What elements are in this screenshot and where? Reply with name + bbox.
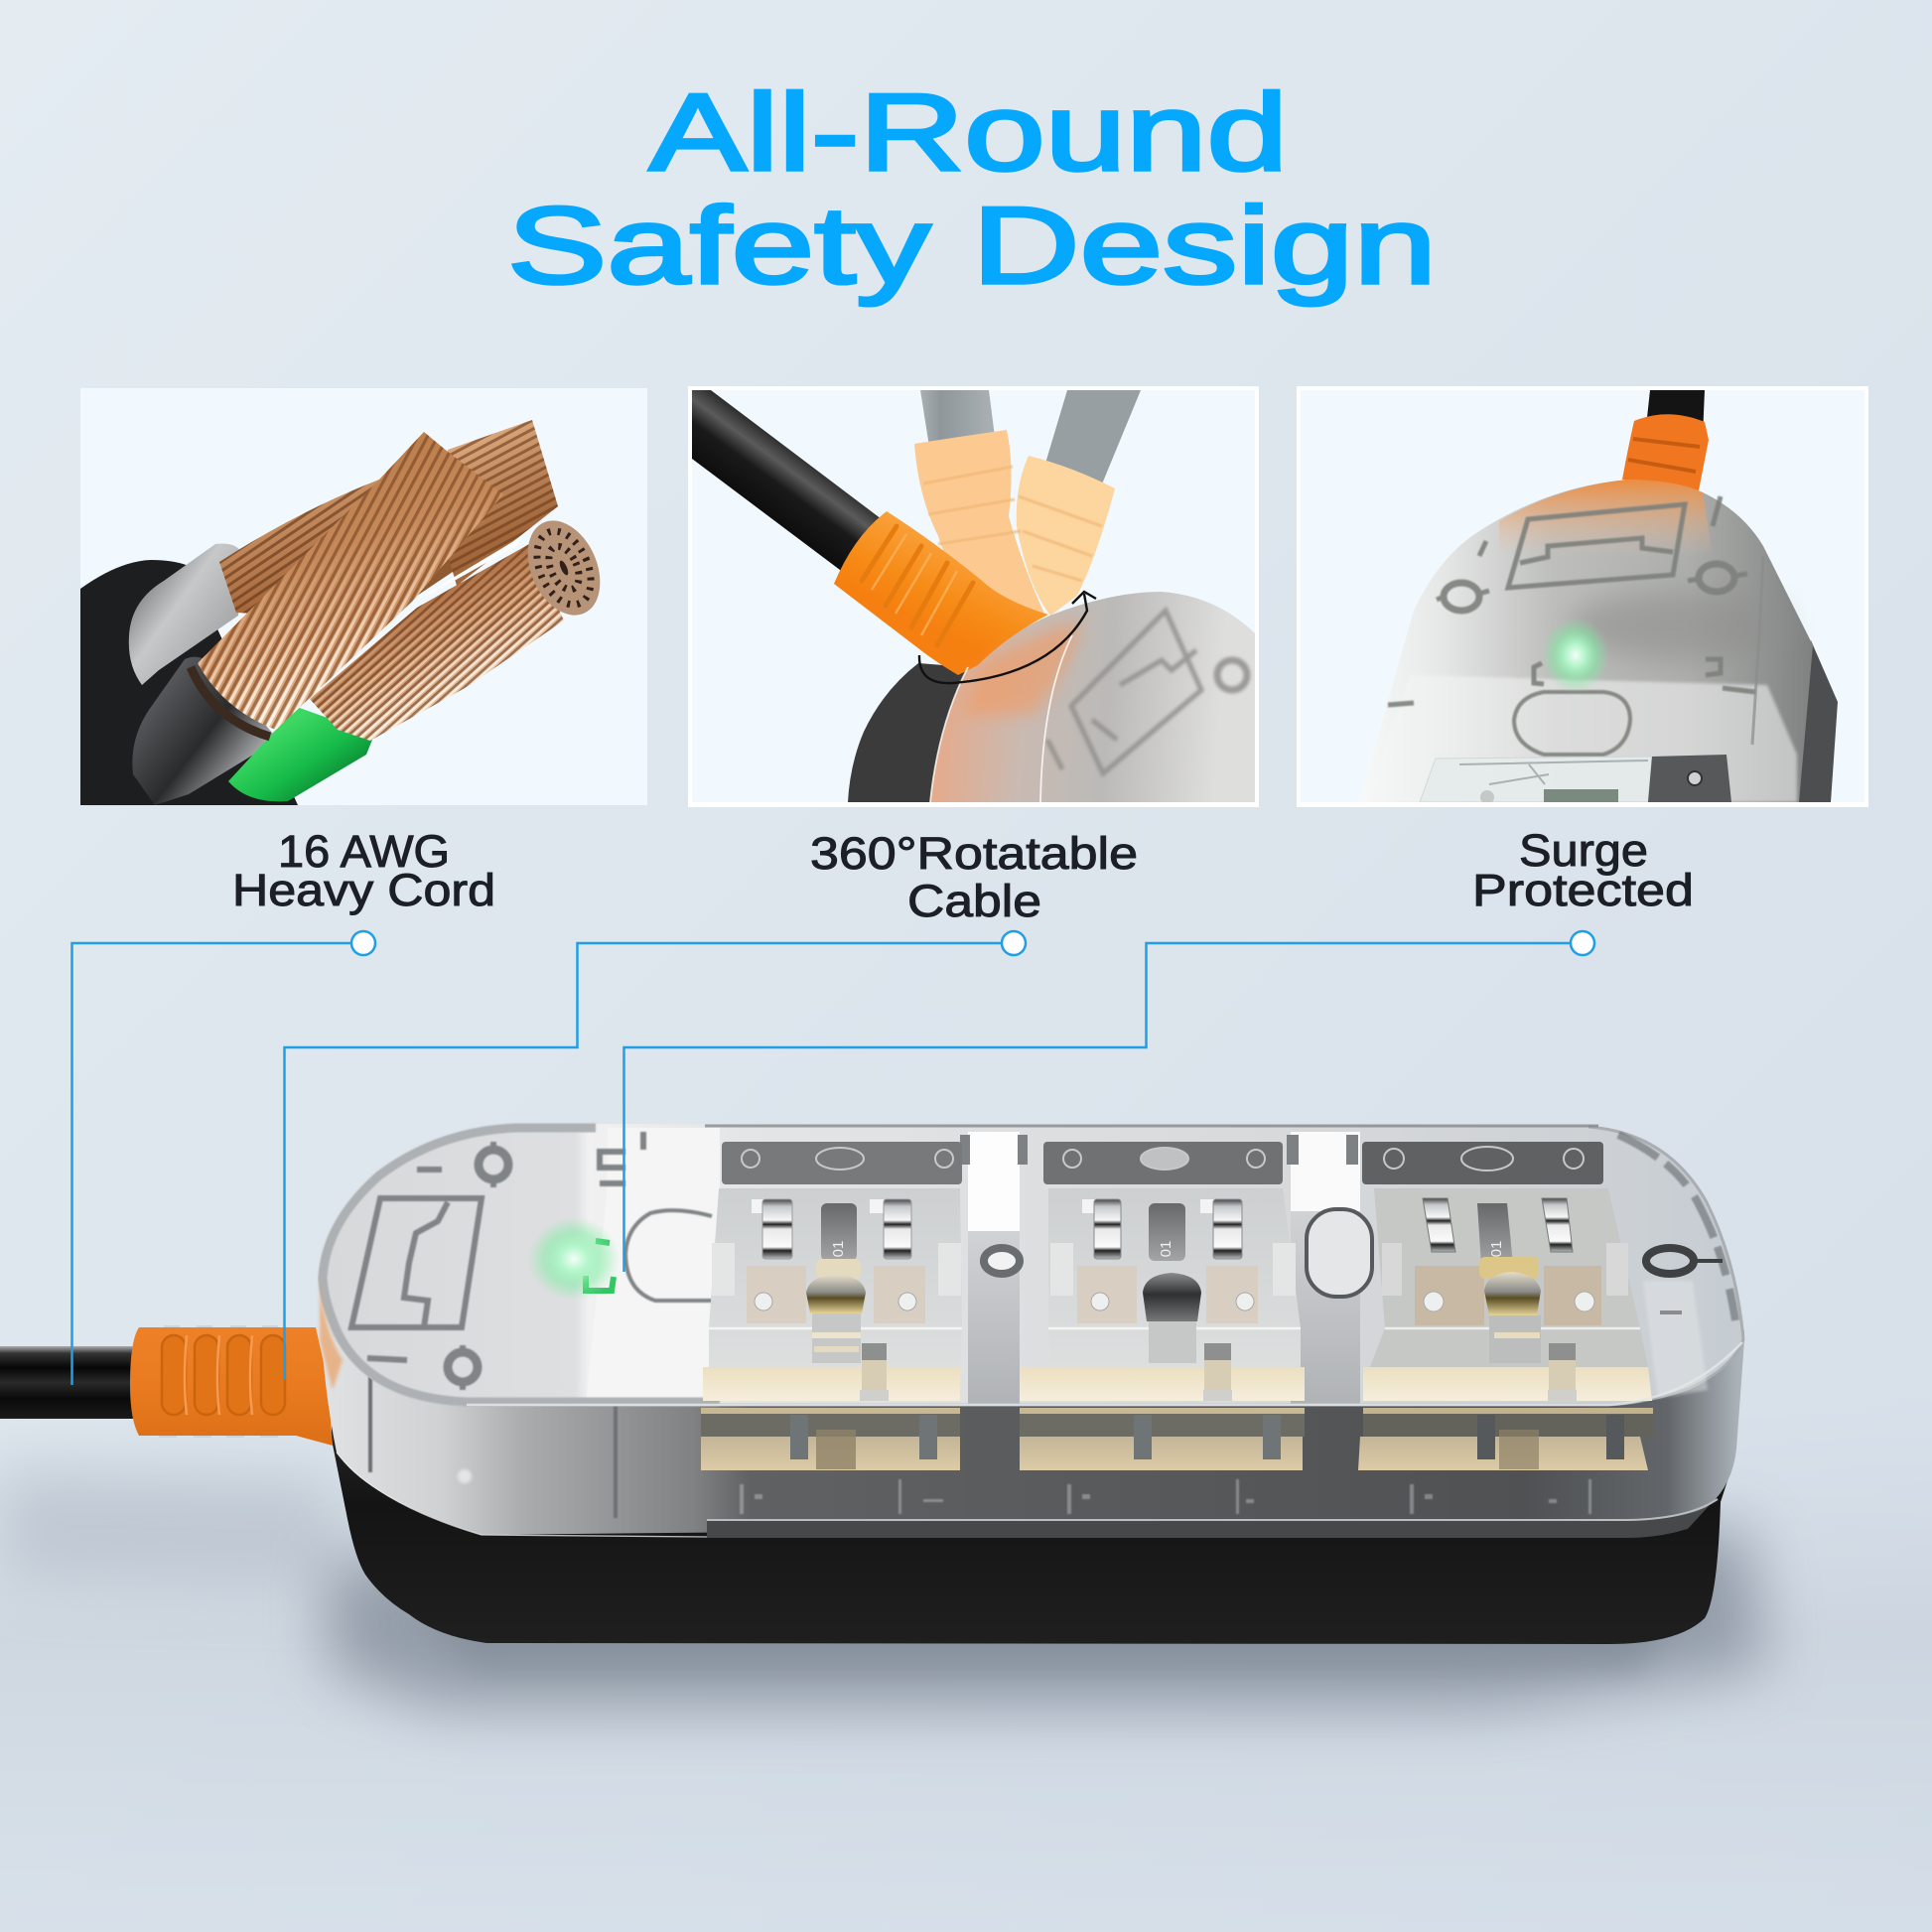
label: 360 Rotatable Cable: Cable: [907, 876, 1041, 926]
circuit line art: [1047, 611, 1247, 773]
orange glow in cap: [963, 621, 1082, 715]
outlet 1 rating text: 01: [830, 1241, 847, 1257]
outlet 3 tab: [1548, 1343, 1577, 1401]
label: 360 Rotatable Cable: [810, 828, 1138, 926]
label: 16 AWG Heavy Cord: 16 AWG: [278, 826, 450, 877]
outlet 2 ground pin: [1143, 1273, 1201, 1363]
dark device shell: [848, 663, 968, 802]
green LED bracket: [586, 1241, 614, 1291]
lid front edge highlight: [467, 1342, 1742, 1405]
outlet 3 screws: [1424, 1292, 1594, 1311]
label: Surge Protected: [1472, 825, 1694, 915]
outlet 2 body detail: [1048, 1243, 1301, 1328]
orange rib highlights: [872, 534, 957, 635]
left base seam: [337, 1452, 707, 1537]
top rim line: [705, 1124, 1598, 1128]
outlet 3 slots: [1423, 1198, 1573, 1252]
cap seam highlight: [930, 635, 1072, 802]
copper strand: centre twist: [198, 432, 503, 730]
outlet 1 slots: [752, 1199, 911, 1259]
outlet 1 screws: [755, 1293, 916, 1311]
status LED glow: [1542, 618, 1609, 693]
outlet 1 ground pin: [806, 1259, 866, 1363]
outlet 3 centre recess: [1477, 1203, 1513, 1265]
outlet 2 tan pads: [1077, 1266, 1258, 1323]
callout connector: 360 rotatable: [284, 931, 1026, 1380]
copper strand: back right: [437, 420, 558, 586]
small light spot: [458, 1469, 472, 1483]
centre column between outlets: [960, 1132, 1028, 1405]
title: All-Round: [649, 71, 1288, 194]
right lid rim: [720, 1127, 1743, 1405]
outlet 2: [1020, 1142, 1305, 1470]
rotation arrow: [919, 592, 1096, 683]
outlet 1 lower cream bar: [701, 1408, 960, 1470]
lid top: [318, 1124, 1744, 1406]
ghost ribs: [923, 467, 1102, 581]
label: 16 AWG Heavy Cord: [232, 826, 495, 915]
outlet 3 cream bar: [1363, 1367, 1652, 1401]
outlet 2 slots: [1082, 1199, 1242, 1259]
white frosted block: [586, 1128, 720, 1404]
right lid clear reflection: [1643, 1281, 1708, 1398]
outlet 1 cream bar: [703, 1367, 960, 1401]
callout connector: surge protected: [623, 931, 1594, 1272]
frosted device cap: [930, 592, 1255, 802]
outlet 2 screws: [1091, 1293, 1254, 1311]
plate screw: [1688, 771, 1702, 785]
grey insulated wire: [129, 544, 243, 685]
outlet 2 tab: [1203, 1343, 1232, 1401]
outlet 1 clear body: [709, 1188, 962, 1367]
right lid glass streaks: [1618, 1135, 1735, 1320]
label: 16 AWG Heavy Cord: Heavy Cord: [232, 865, 495, 915]
outlet 1 centre recess: [821, 1203, 857, 1261]
outlet 1: [701, 1142, 962, 1470]
outlet 1 top plate: [722, 1142, 962, 1184]
orange ribs: [1628, 439, 1700, 472]
black cord jacket: [80, 560, 298, 805]
outlet 3 top plate: [1362, 1142, 1603, 1184]
device shadow on floor: [0, 1469, 1767, 1708]
outlet 2 centre recess: [1149, 1203, 1185, 1261]
outlet 1 tan pads: [747, 1266, 925, 1323]
title: [507, 71, 1437, 307]
ghost strain relief left: [914, 430, 1044, 625]
orange ribs: [862, 526, 973, 645]
black base: [332, 1390, 1734, 1644]
outlet 1 tab: [860, 1343, 889, 1401]
outlet 3: [1358, 1142, 1653, 1470]
outlet 2 plate holes: [1063, 1148, 1265, 1170]
orange strain relief: [1622, 414, 1709, 490]
outlet 3 plate holes: [1384, 1147, 1584, 1171]
status LED glow: [528, 1217, 620, 1301]
black power cord: [692, 390, 882, 573]
dark side of housing: [1787, 640, 1838, 802]
orange strain relief: [130, 1326, 333, 1446]
circuit line art: [1388, 496, 1755, 755]
outlet 2 cream bar: [1020, 1367, 1305, 1401]
outlet 2 rating text: 01: [1158, 1241, 1174, 1257]
outlet 3 lower cream bar: [1358, 1408, 1653, 1470]
right column between outlets: [1287, 1132, 1372, 1405]
outlet 2 clear body: [1048, 1188, 1301, 1367]
dark copper backing: [417, 558, 453, 596]
outlet 3 tan pads: [1415, 1266, 1601, 1325]
dark metal plate: [1648, 755, 1731, 802]
right lid circuit circle: [1646, 1248, 1723, 1312]
wall vertical lines: [370, 1358, 616, 1518]
copper strand: back left: [219, 480, 379, 614]
orange strain relief: [834, 511, 1048, 675]
grey ghost cables: [920, 390, 1141, 486]
power cord: [0, 1346, 134, 1419]
callout connector: 16 AWG: [71, 931, 375, 1385]
black power cord: [1647, 390, 1705, 421]
base lip highlight: [707, 1499, 1718, 1520]
circuit line art under frosted lid: [351, 1132, 712, 1390]
power strip product: [0, 1124, 1744, 1644]
outlet 1 body detail: [709, 1243, 962, 1328]
outlet 3 ground pin: [1479, 1257, 1541, 1363]
outlet 3 clear body: [1370, 1188, 1648, 1367]
outlet 1 plate holes: [742, 1148, 953, 1170]
left lid rim: [323, 1128, 720, 1402]
lower light band: [1365, 675, 1797, 802]
outlet 3 rating text: 01: [1488, 1241, 1505, 1257]
orange tint through lid: [320, 1281, 343, 1390]
clear wall front: [320, 1311, 1744, 1535]
outlet 2 lower cream bar: [1020, 1408, 1305, 1470]
base lip band: [707, 1505, 1710, 1538]
internal speckles: [740, 1479, 1591, 1514]
title: Safety Design: [507, 185, 1437, 307]
copper strand: front lower: [310, 544, 564, 741]
ghost strain relief right: [1017, 456, 1115, 616]
label: 360 Rotatable Cable: 360°Rotatable: [810, 828, 1138, 879]
panel: 16 AWG heavy cord close-up: [80, 388, 647, 805]
strand end cross-section: [528, 520, 600, 616]
clear outlet block: [1420, 757, 1652, 802]
outlet 3 body detail: [1382, 1243, 1640, 1328]
darker band in housing: [1569, 592, 1787, 659]
orange tint at top of housing: [1499, 480, 1713, 556]
wire collar: [191, 667, 270, 737]
outlet inner detail: [1459, 760, 1648, 804]
label: Surge Protected: Surge: [1519, 825, 1648, 876]
panel: 360 rotatable cable close-up: [688, 386, 1259, 807]
label: Surge Protected: Protected: [1472, 865, 1694, 915]
panel: surge protected close-up: [1297, 386, 1868, 807]
housing seam: [1752, 556, 1763, 745]
outlet 2 top plate: [1043, 1142, 1283, 1184]
frosted housing: [1359, 480, 1813, 802]
green ground wire: [228, 707, 374, 801]
dark insulated wire: [132, 657, 278, 805]
white gap between strands: [413, 536, 522, 602]
